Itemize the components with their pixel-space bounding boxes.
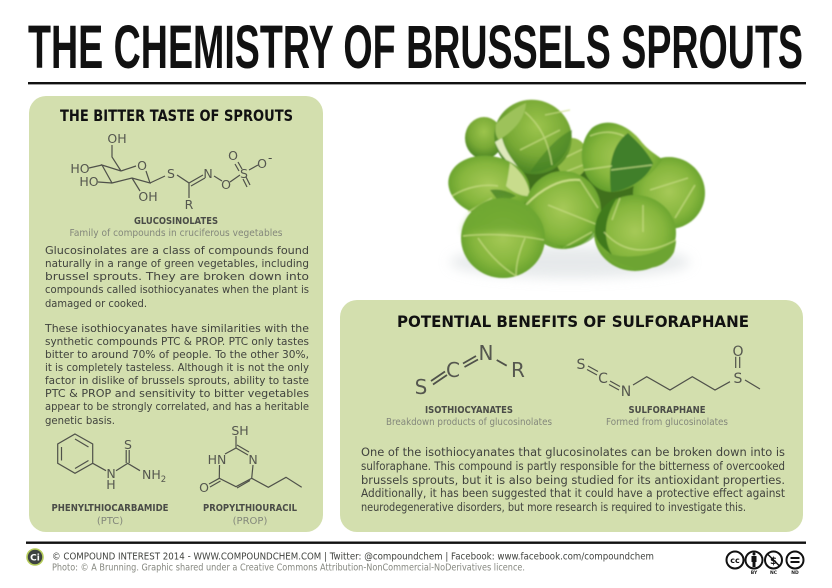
- text block: glucosinolates paragraph: Glucosinolates are a class of compounds found: [45, 244, 309, 257]
- molecule: glucosinolates: HO: [79, 174, 99, 189]
- molecule: phenylthiocarbamide: 2: [161, 475, 166, 485]
- molecule: sulforaphane: [577, 344, 760, 400]
- molecule: glucosinolates: HO: [70, 161, 90, 176]
- molecule: glucosinolates: [70, 131, 272, 212]
- icon: creative commons badges: cc: [730, 556, 740, 565]
- molecule: glucosinolates: O: [137, 158, 147, 173]
- molecule: glucosinolates: S: [167, 166, 175, 181]
- molecule: propylthiouracil: O: [199, 480, 209, 495]
- panel: bitter taste of sprouts: [29, 96, 323, 532]
- photo: brussels sprouts: [443, 89, 705, 278]
- text block: glucosinolates paragraph: brussel sprouts. They are broken down into: [45, 270, 309, 283]
- text block: isothiocyanates paragraph: These isothiocyanates have similarities with the: [44, 322, 309, 335]
- molecule: sulforaphane: S: [734, 371, 743, 387]
- text block: sulforaphane paragraph: sulforaphane. This compound is partly responsible for the bitterness of overcooked: [361, 460, 785, 473]
- icon: creative commons badges: ND: [791, 570, 799, 576]
- molecule: phenylthiocarbamide: S: [124, 437, 132, 452]
- heading: bitter taste: THE BITTER TASTE OF SPROUTS: [60, 106, 293, 125]
- label: phenylthiocarbamide: PHENYLTHIOCARBAMIDE: [52, 503, 168, 514]
- molecule: propylthiouracil: N: [248, 452, 258, 467]
- caption: PTC: (PTC): [97, 516, 123, 527]
- text block: isothiocyanates paragraph: factor in dislike of brussels sprouts, ability to taste: [45, 374, 309, 387]
- icon: compound interest logo: Ci: [30, 554, 40, 564]
- molecule: propylthiouracil: [199, 423, 302, 495]
- molecule: sulforaphane: C: [598, 371, 608, 387]
- text block: isothiocyanates paragraph: it is completely tasteless. Although it is not the only: [45, 361, 310, 374]
- text block: sulforaphane paragraph: Additionally, it has been suggested that it could have a protective effect against: [361, 487, 786, 500]
- molecule: isothiocyanates: C: [446, 358, 460, 382]
- text block: sulforaphane paragraph: [361, 446, 786, 514]
- text block: isothiocyanates paragraph: [44, 322, 310, 427]
- icon: creative commons badges: NC: [770, 570, 778, 576]
- panel: potential benefits of sulforaphane: [340, 300, 803, 532]
- molecule: phenylthiocarbamide: NH: [142, 467, 161, 482]
- text block: isothiocyanates paragraph: synthetic compounds PTC & PROP. PTC only tastes: [45, 335, 309, 348]
- label: propylthiouracil: PROPYLTHIOURACIL: [203, 503, 297, 514]
- molecule: glucosinolates: O: [257, 156, 267, 171]
- text block: isothiocyanates paragraph: appear to be strongly correlated, and has a heritable: [45, 400, 309, 413]
- caption: sulforaphane: Formed from glucosinolates: [606, 417, 728, 428]
- molecule: sulforaphane: N: [621, 384, 631, 400]
- text block: glucosinolates paragraph: compounds called isothiocyanates when the plant is: [45, 283, 309, 296]
- molecule: isothiocyanates: N: [479, 341, 493, 365]
- text block: isothiocyanates paragraph: bitter to around 70% of people. To the other 30%,: [45, 348, 309, 361]
- text block: glucosinolates paragraph: damaged or cooked.: [45, 297, 147, 310]
- label: glucosinolates: GLUCOSINOLATES: [134, 216, 218, 227]
- text block: sulforaphane paragraph: brussels sprouts, but it is also being studied for its antioxidant properties.: [361, 474, 785, 487]
- text block: sulforaphane paragraph: One of the isothiocyanates that glucosinolates can be broken down into is: [361, 446, 785, 459]
- molecule: propylthiouracil: HN: [208, 452, 226, 467]
- caption: isothiocyanates: Breakdown products of glucosinolates: [386, 417, 552, 428]
- icon: creative commons badges: [726, 552, 804, 576]
- molecule: sulforaphane: O: [732, 344, 744, 360]
- molecule: glucosinolates: O: [228, 148, 238, 163]
- molecule: phenylthiocarbamide: H: [106, 477, 116, 492]
- molecule: isothiocyanates: [415, 341, 525, 399]
- footer credit: © COMPOUND INTEREST 2014 - WWW.COMPOUNDCHEM.COM | Twitter: @compoundchem | Facebook: www.facebook.com/compoundchem: [52, 552, 654, 562]
- dark gaps between sprouts: [500, 150, 640, 240]
- molecule: glucosinolates: R: [185, 197, 194, 212]
- caption: glucosinolates: Family of compounds in cruciferous vegetables: [70, 228, 282, 239]
- molecule: phenylthiocarbamide: N: [106, 466, 116, 481]
- text block: isothiocyanates paragraph: PTC & PROP and sensitivity to bitter vegetables: [45, 387, 309, 400]
- molecule: sulforaphane: S: [577, 357, 586, 373]
- molecule: phenylthiocarbamide: [58, 434, 166, 492]
- icon: creative commons badges: BY: [751, 570, 758, 576]
- label: sulforaphane: SULFORAPHANE: [628, 405, 706, 416]
- molecule: isothiocyanates: R: [511, 358, 525, 382]
- label: isothiocyanates: ISOTHIOCYANATES: [425, 405, 513, 416]
- text block: glucosinolates paragraph: [45, 244, 309, 310]
- molecule: glucosinolates: O: [221, 177, 231, 192]
- heading: potential benefits: POTENTIAL BENEFITS OF SULFORAPHANE: [397, 312, 749, 331]
- icon: compound interest logo: [27, 549, 43, 565]
- footer licence: Photo: © A Brunning. Graphic shared under a Creative Commons Attribution-NonCommercial-NoDerivatives licence.: [52, 562, 525, 574]
- molecule: glucosinolates: -: [268, 151, 272, 165]
- molecule: propylthiouracil: SH: [231, 423, 249, 438]
- caption: PROP: (PROP): [233, 516, 267, 527]
- molecule: isothiocyanates: S: [415, 375, 427, 399]
- molecule: glucosinolates: S: [240, 166, 248, 181]
- molecule: glucosinolates: OH: [138, 189, 158, 204]
- text block: isothiocyanates paragraph: genetic basis.: [45, 414, 115, 427]
- icon: creative commons badges: $: [770, 556, 777, 567]
- molecule: glucosinolates: N: [203, 166, 213, 181]
- text block: glucosinolates paragraph: naturally in a range of green vegetables, including: [45, 257, 309, 270]
- molecule: glucosinolates: OH: [107, 131, 127, 146]
- text block: sulforaphane paragraph: neurodegenerative disorders, but more research is required to investigate this.: [361, 501, 746, 514]
